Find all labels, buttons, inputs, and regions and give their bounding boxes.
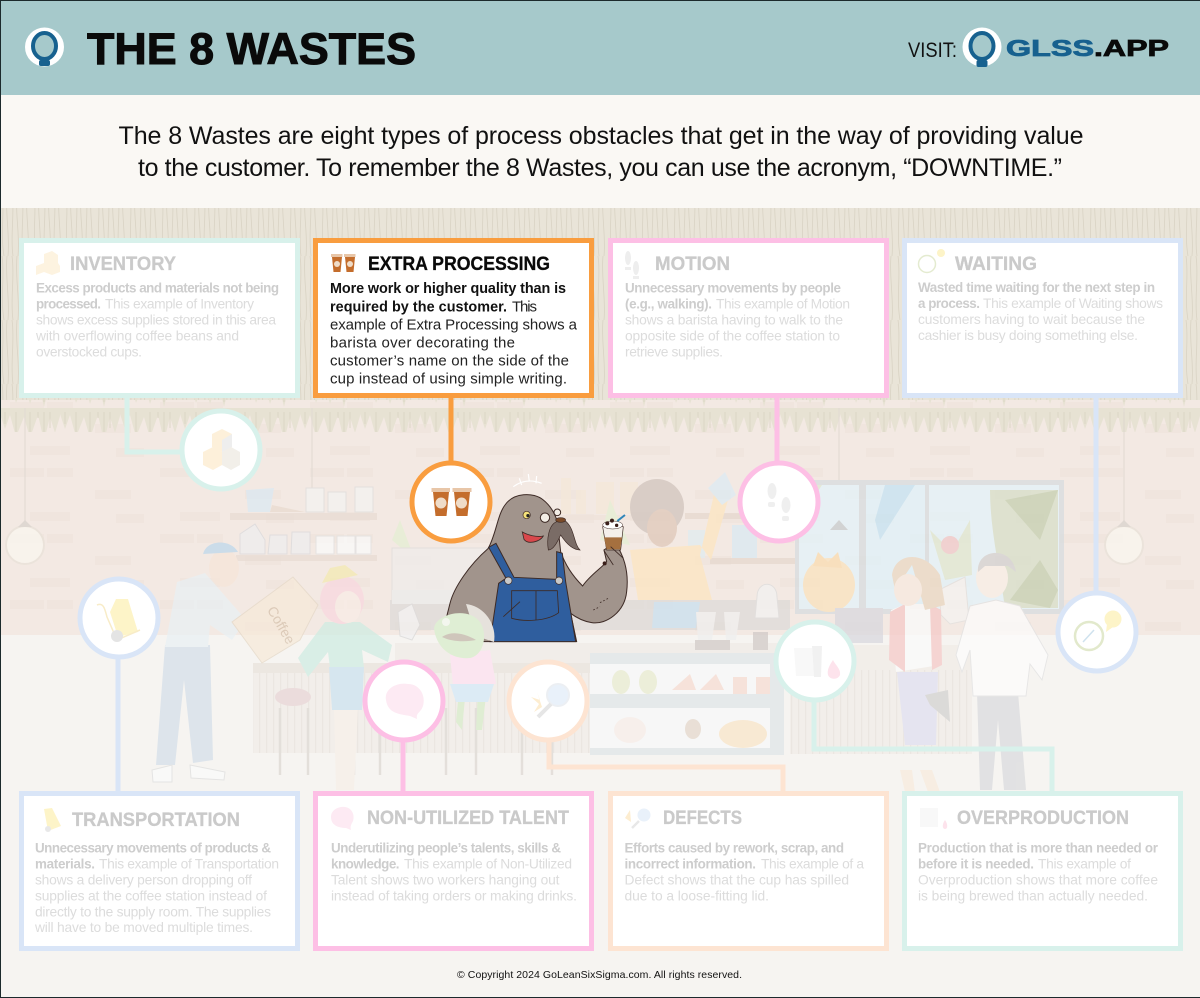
description: due to a loose-fitting lid. [624, 888, 769, 904]
description: a process. [918, 296, 980, 311]
description: This example of Non-Utilized [404, 856, 572, 872]
description: shows a barista having to walk to the [625, 312, 843, 328]
description: materials. [35, 856, 95, 872]
description: Defect shows that the cup has spilled [624, 872, 849, 888]
intro band: to the customer. To remember the 8 Wastes, you can use the acronym, “DOWNTIME.” [138, 154, 1062, 182]
description: shows a delivery person dropping off [35, 872, 252, 888]
visit link: .APP [1094, 35, 1169, 61]
panel: inventory [22, 240, 298, 396]
description: knowledge. [331, 856, 400, 872]
description: opposite side of the coffee station to [625, 328, 840, 344]
character: delivery person: Coffee [264, 603, 299, 647]
icon: brain [331, 807, 354, 830]
mouth [522, 532, 543, 542]
icon circle: defects [509, 662, 587, 740]
description: This example of Transportation [99, 856, 279, 872]
description: This example of Waiting shows [983, 296, 1163, 311]
description: customer’s name on the side of the [330, 352, 569, 370]
description: Underutilizing people’s talents, skills & [331, 840, 561, 856]
visit link: GLSS [1006, 35, 1094, 61]
visit link: VISIT: [908, 39, 957, 62]
icon: hand truck [44, 808, 61, 832]
icon circle: extra processing [412, 463, 490, 541]
icon: magnifier [625, 808, 650, 828]
character: barista girl [298, 565, 392, 790]
description: Efforts caused by rework, scrap, and [624, 840, 844, 856]
heading: MOTION [655, 253, 730, 275]
panel: waiting [904, 240, 1180, 396]
background: brick wall [0, 400, 1200, 635]
header band [0, 0, 1200, 95]
description: cup instead of using simple writing. [330, 370, 567, 388]
heading: INVENTORY [70, 253, 176, 275]
character: customers and plant [889, 520, 1048, 792]
cup [603, 527, 623, 550]
heading: EXTRA PROCESSING [368, 253, 550, 275]
description: will have to be moved multiple times. [34, 920, 253, 935]
body [447, 495, 627, 642]
description: supplies at the coffee station instead of [35, 888, 267, 904]
counter [253, 643, 972, 754]
icon: logo [25, 28, 64, 66]
description: before it is needed. [918, 856, 1034, 872]
title: THE 8 WASTES [87, 25, 416, 74]
description [34, 840, 279, 935]
description: Talent shows two workers hanging out [331, 872, 560, 888]
icon circle: inventory [182, 411, 260, 489]
description [918, 280, 1163, 343]
description [331, 840, 577, 904]
description [625, 280, 850, 360]
description: with overflowing coffee beans and [35, 328, 239, 344]
window [795, 480, 1064, 614]
description: Unnecessary movements of products & [35, 840, 271, 856]
intro band [0, 95, 1200, 208]
espresso machine [390, 548, 790, 640]
overalls [489, 543, 576, 642]
description: (e.g., walking). [625, 296, 712, 312]
description: This example of [1038, 856, 1131, 872]
character: delivery person [152, 543, 318, 782]
description: example of Extra Processing shows a [330, 316, 578, 334]
character: fox cashier [803, 552, 883, 643]
scene: cafe illustration (faded) [6, 408, 1143, 792]
description: Wasted time waiting for the next step in [918, 280, 1155, 295]
description: This example of a [761, 856, 864, 872]
background: thatch fringe [0, 398, 1200, 432]
description: overstocked cups. [36, 344, 142, 360]
description: Unnecessary movements by people [625, 280, 841, 296]
description [35, 280, 279, 360]
panel: non-utilized talent [316, 794, 592, 948]
heading: DEFECTS [663, 807, 742, 829]
description: retrieve supplies. [625, 344, 723, 360]
eye [523, 511, 530, 519]
heading: WAITING [955, 253, 1037, 275]
description: This [512, 298, 537, 316]
description: incorrect information. [624, 856, 756, 872]
icon circle: overproduction [776, 622, 854, 700]
description [624, 840, 864, 904]
stools [275, 688, 552, 775]
icon circle: waiting [1058, 593, 1136, 671]
description: Production that is more than needed or [918, 840, 1159, 856]
character: barista with afro [630, 472, 779, 650]
icon: cups and flame [920, 808, 947, 829]
panel: overproduction [904, 794, 1180, 948]
description: barista over decorating the [330, 334, 515, 352]
description: Excess products and materials not being [36, 280, 279, 296]
icon: coffee cups [331, 254, 356, 272]
icon circle: transportation [80, 579, 158, 657]
description: shows excess supplies stored in this area [36, 312, 276, 328]
icon circle: non-utilized talent [365, 662, 443, 740]
description: customers having to wait because the [918, 312, 1145, 327]
description: is being brewed than actually needed. [918, 888, 1148, 904]
icon: footprints [625, 251, 639, 279]
description: cashier is busy doing something else. [918, 328, 1138, 343]
visit link [908, 28, 1169, 67]
description: This example of Inventory [105, 296, 254, 312]
panel: extra processing [316, 240, 592, 396]
heading: TRANSPORTATION [72, 809, 240, 831]
description: required by the customer. [330, 300, 507, 316]
copyright: © Copyright 2024 GoLeanSixSigma.com. All rights reserved. [457, 969, 742, 981]
sparkle [513, 474, 542, 487]
icon: clock [918, 249, 945, 272]
description [918, 840, 1159, 904]
description: This example of Motion [716, 296, 850, 312]
panel: motion [610, 240, 886, 396]
panel: defects [610, 794, 886, 948]
icon: cubes [36, 251, 60, 275]
mascot: walrus barista [447, 474, 627, 642]
moustache [548, 521, 580, 550]
description: instead of taking orders or making drinks. [331, 888, 577, 904]
shelves [230, 478, 795, 564]
heading: NON-UTILIZED TALENT [367, 807, 569, 829]
panel: transportation [22, 794, 298, 948]
character: frog in front of mascot [434, 604, 500, 730]
description: processed. [36, 296, 101, 312]
description: directly to the supply room. The supplies [35, 904, 271, 920]
description: Overproduction shows that more coffee [918, 872, 1158, 888]
description: More work or higher quality than is [330, 281, 566, 297]
connector lines [118, 398, 1096, 792]
glasses [540, 513, 550, 522]
icon circle: motion [740, 463, 818, 541]
background: thatch roof [0, 208, 1200, 400]
pastry case [590, 653, 784, 755]
description [330, 281, 578, 388]
intro band: The 8 Wastes are eight types of process obstacles that get in the way of providing value [118, 122, 1084, 150]
lamps [6, 408, 1143, 564]
heading: OVERPRODUCTION [957, 807, 1129, 829]
